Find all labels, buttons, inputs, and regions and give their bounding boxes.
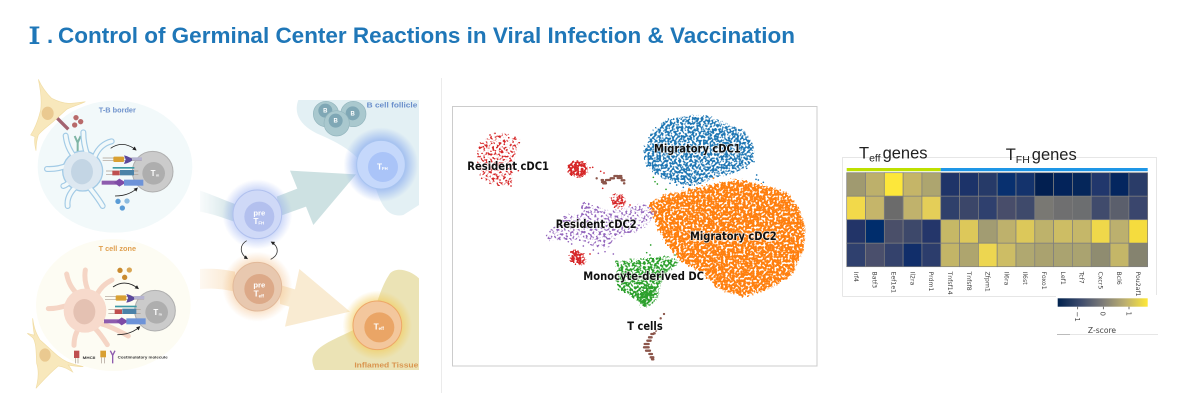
cell: Teff: eff: [379, 326, 385, 331]
panel: heatmap: [842, 144, 1158, 335]
heatmap cells: [847, 173, 1148, 267]
dendritic cell bottom: [48, 270, 128, 345]
cell: pre Teff: T: [254, 289, 259, 299]
gene labels: Il2ra: [908, 272, 915, 286]
title: .: [47, 23, 53, 48]
icon: stromal cell nucleus top: [42, 107, 54, 120]
colour bar legend: [1057, 298, 1158, 335]
cluster: small red groups: [568, 161, 630, 265]
label: Resident cDC2: Resident cDC2: [556, 218, 637, 231]
dendritic nucleus top: [71, 159, 93, 184]
heading: TFH genes: T: [1006, 146, 1016, 164]
gene labels: Il6st: [1021, 272, 1028, 285]
cell: Teff: [343, 291, 412, 360]
label: T cells: T cells: [627, 320, 663, 333]
title: Control of Germinal Center Reactions in Viral Infection & Vaccination: [58, 23, 795, 48]
icon: stromal cell nucleus bottom: [39, 348, 51, 362]
cluster: T cells: [644, 314, 664, 359]
cytokine dots blue: [115, 198, 130, 211]
B cells: B: [334, 119, 339, 125]
label: T cell zone: T cell zone: [99, 244, 136, 253]
arrow: orange incoming: [200, 269, 235, 292]
T cell top: T: [151, 169, 156, 178]
heading: Teff genes: genes: [883, 144, 928, 162]
T cell bottom: m: [159, 313, 163, 317]
label: T-B border: T-B border: [99, 106, 136, 115]
label: Resident cDC1: Resident cDC1: [467, 160, 549, 173]
heading: Teff genes: eff: [869, 152, 881, 164]
cluster: Resident cDC2: [547, 202, 658, 254]
arrow: teal to TFH: [277, 171, 356, 225]
B cells: [313, 101, 366, 136]
icon: stromal cell bottom: [27, 318, 83, 388]
cell: pre TFH: FH: [258, 221, 264, 226]
cell: pre Teff: eff: [259, 293, 265, 298]
gene labels: Eef1e1: [890, 272, 896, 293]
inflamed tissue region: [312, 270, 419, 370]
gene labels: Irf4: [852, 272, 859, 282]
label: Migratory cDC2: Migratory cDC2: [690, 230, 777, 243]
gene labels: Tnfsf14: [946, 270, 953, 295]
synapse receptors bottom: [104, 283, 146, 335]
gene labels: Cxcr5: [1096, 272, 1103, 289]
cluster: Resident cDC1: [478, 133, 521, 186]
T cell bottom: T: [153, 308, 158, 317]
panel: antigen presenting niches: [27, 79, 192, 388]
gene labels: Lef1: [1059, 272, 1066, 285]
colour bar legend: Z-score: [1088, 326, 1116, 335]
panel: T cell differentiation: [200, 100, 419, 370]
cell: TFH: FH: [382, 166, 388, 171]
colour bar legend: −1: [1073, 312, 1081, 322]
gene labels: Tnfsf8: [965, 270, 972, 291]
gene labels: Pou2af1: [1134, 272, 1141, 297]
cell: pre TFH: [222, 179, 292, 249]
colour bar legend: 0: [1099, 312, 1107, 316]
label: Migratory cDC1: Migratory cDC1: [654, 142, 741, 156]
T-B border niche: [31, 79, 192, 233]
arrows: reciprocal conversion: [241, 241, 277, 259]
T cell top: m: [156, 174, 160, 178]
heading: Teff genes: T: [859, 144, 869, 162]
panel: UMAP scatter plot: [452, 106, 817, 366]
legend: molecules: MHCII: [83, 356, 95, 360]
dendritic nucleus bottom: [73, 299, 95, 324]
arrow: orange to Teff: [280, 269, 350, 327]
T cell bottom: [135, 290, 175, 331]
B cells: B: [351, 111, 356, 117]
title: Ⅰ: [24, 20, 46, 50]
label: Inflamed Tissue: Inflamed Tissue: [354, 360, 418, 369]
gene labels: Zfpm1: [984, 272, 991, 292]
gene labels: Tcf7: [1078, 270, 1085, 284]
label: Monocyte-derived DC: Monocyte-derived DC: [583, 270, 704, 283]
gene labels: Batf3: [871, 272, 878, 288]
T cell top: [132, 151, 173, 192]
cell: TFH: [344, 127, 418, 202]
cell: pre TFH: pre: [253, 208, 265, 217]
cluster: Migratory cDC2: [648, 178, 805, 297]
legend: molecules: Costimulatory molecule: [118, 356, 168, 360]
cluster: Migratory cDC1: [643, 115, 763, 190]
gene labels: [852, 270, 1141, 297]
icon: stromal cell top: [31, 79, 85, 151]
B cells: B: [323, 109, 328, 115]
label: B cell follicle: B cell follicle: [367, 100, 417, 109]
cytokine dots orange: [117, 267, 132, 280]
dendritic cell top: [47, 132, 112, 206]
T cell zone niche: [27, 239, 191, 388]
gene labels: Prdm1: [927, 272, 934, 292]
cell: pre TFH: T: [253, 216, 258, 226]
gene group colour bar: [847, 168, 1148, 171]
gene labels: Bcl6: [1115, 272, 1122, 285]
gene labels: Foxo1: [1040, 272, 1047, 290]
legend: molecules: [74, 351, 168, 363]
cell: TFH: T: [377, 161, 382, 171]
cluster: brown top: [597, 176, 624, 183]
cell: Teff: T: [374, 321, 379, 331]
B cell follicle region: [297, 100, 419, 215]
heading: TFH genes: genes: [1032, 146, 1077, 164]
cell: pre Teff: pre: [253, 280, 265, 289]
arrow: teal incoming: [200, 191, 235, 222]
cell: pre Teff: [222, 252, 292, 322]
colour bar legend: 1: [1124, 312, 1132, 316]
divider: [441, 78, 442, 393]
synapse receptors top: [102, 144, 143, 196]
icon: molecule and dots top: [57, 115, 83, 152]
gene labels: Il6ra: [1002, 272, 1009, 286]
heading: TFH genes: FH: [1016, 154, 1030, 166]
cluster: Monocyte-derived DC: [617, 177, 681, 308]
